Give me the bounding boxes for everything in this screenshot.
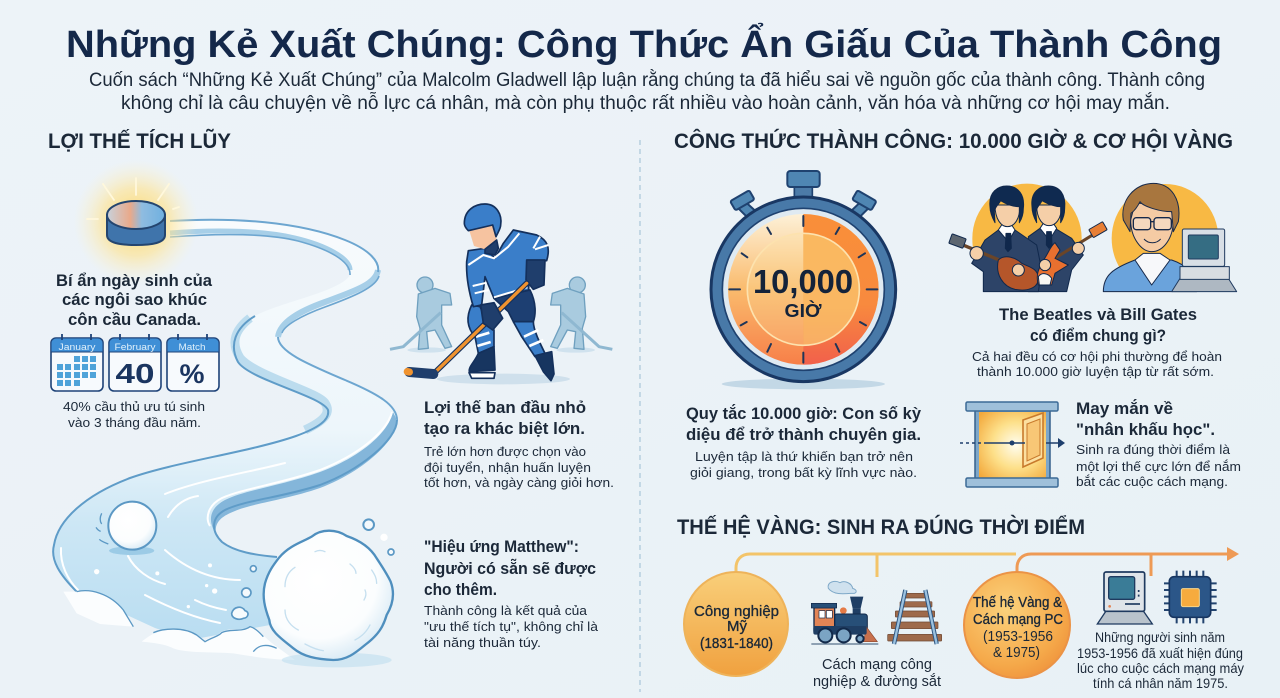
icon: window of opportunity [960, 402, 1065, 487]
illustration: hockey players [390, 204, 612, 384]
caption: railroad revolution [813, 656, 942, 690]
node: American industry: Công nghiệp [694, 604, 779, 620]
text block: 10,000 hour rule [686, 404, 922, 480]
node: golden generation and PC revolution: (1953-1956 [983, 629, 1053, 645]
small snowball [96, 502, 156, 555]
body: small advantage: đội tuyển, nhận huấn luyện [424, 460, 591, 475]
heading: small advantage [424, 398, 586, 438]
icon: microchip [1164, 571, 1217, 623]
heading: cumulative advantage: LỢI THẾ TÍCH LŨY [48, 129, 231, 153]
calendar: January [51, 334, 103, 391]
node: golden generation and PC revolution: Cách mạng PC [973, 612, 1063, 628]
heading: Beatles and Gates: có điểm chung gì? [1030, 326, 1166, 345]
icon: glowing puck [74, 160, 198, 284]
icon: stopwatch 10,000 hours: 10,000 [753, 263, 853, 300]
large snowball [264, 531, 393, 667]
heading: success formula: CÔNG THỨC THÀNH CÔNG: 10.000 GIỜ & CƠ HỘI VÀNG [674, 129, 1233, 153]
text block: Beatles and Gates [972, 305, 1222, 379]
snow piles [63, 591, 295, 660]
heading: small advantage: Lợi thế ban đầu nhỏ [424, 398, 586, 417]
timeline arrow [736, 547, 1239, 577]
caption: born 1953-1956: Những người sinh năm [1095, 629, 1225, 645]
figure: right background player [551, 277, 612, 353]
caption: railroad revolution: nghiệp & đường sắt [813, 673, 942, 690]
body: Beatles and Gates [972, 349, 1222, 379]
icon: stopwatch 10,000 hours: GIỜ [784, 300, 822, 321]
heading: demographic luck: "nhân khấu học". [1076, 420, 1215, 439]
caption: born 1953-1956: tính cá nhân năm 1975. [1093, 675, 1228, 691]
illustration: ice ribbon path [53, 220, 397, 640]
computer [1172, 229, 1237, 292]
node: golden generation and PC revolution: Thế hệ Vàng & [973, 595, 1062, 611]
snow particles [94, 519, 394, 619]
head and helmet [469, 225, 497, 249]
heading: Matthew effect [424, 537, 596, 599]
icons: three calendars [51, 334, 219, 391]
body: Matthew effect: Thành công là kết quả của [424, 603, 588, 618]
text: 40 percent caption: 40% cầu thủ ưu tú sinh [63, 399, 205, 414]
text block: demographic luck [1076, 399, 1241, 489]
text: birthday mystery heading [56, 272, 213, 329]
illustration: snowballs and snow [63, 502, 394, 667]
calendar: March percent [167, 334, 219, 391]
icon: steam locomotive [811, 581, 878, 644]
intro paragraph [89, 69, 1205, 114]
calendar: February 40 [109, 334, 161, 391]
figure: left background player [390, 277, 452, 353]
icon: railroad track [888, 590, 942, 644]
heading: demographic luck: May mắn về [1076, 399, 1173, 418]
node: American industry: Mỹ [727, 619, 748, 635]
body: demographic luck: bắt các cuộc cách mạng. [1076, 474, 1228, 489]
heading: Beatles and Gates: The Beatles và Bill Gates [999, 305, 1197, 324]
body: demographic luck: một lợi thế cực lớn để nắm [1076, 459, 1241, 474]
text: birthday mystery heading: côn cầu Canada. [68, 311, 201, 329]
heading: 10,000 hour rule: Quy tắc 10.000 giờ: Con số kỳ [686, 404, 922, 423]
text block: Matthew effect [424, 537, 599, 650]
text block: small advantage [424, 398, 614, 490]
heading: demographic luck [1076, 399, 1215, 439]
body: small advantage: tốt hơn, và ngày càng giỏi hơn. [424, 475, 614, 490]
text: 40 percent caption: vào 3 tháng đầu năm. [68, 415, 201, 430]
body: Beatles and Gates: Cả hai đều có cơ hội phi thường để hoàn [972, 349, 1222, 364]
figure: The Beatles [949, 184, 1107, 292]
node: golden generation and PC revolution [964, 572, 1070, 678]
caption: born 1953-1956: 1953-1956 đã xuất hiện đúng [1077, 645, 1243, 661]
intro paragraph: không chỉ là câu chuyện về nỗ lực cá nhân, mà còn phụ thuộc rất nhiều vào hoàn cảnh, văn hóa và những cơ hội may mắn. [121, 92, 1170, 114]
body: Matthew effect: "ưu thế tích tụ", không chỉ là [424, 619, 599, 634]
node: American industry: (1831-1840) [700, 636, 773, 652]
illustration: The Beatles and Bill Gates [949, 183, 1237, 292]
body: 10,000 hour rule [690, 449, 917, 480]
text: birthday mystery heading: Bí ẩn ngày sinh của [56, 272, 213, 290]
hockey stick [407, 283, 527, 374]
icon: stopwatch 10,000 hours [711, 171, 896, 389]
text: 40 percent caption [63, 399, 205, 430]
heading: 10,000 hour rule [686, 404, 922, 444]
legs [494, 290, 535, 322]
caption: railroad revolution: Cách mạng công [822, 656, 932, 673]
body: small advantage [424, 444, 614, 490]
node: golden generation and PC revolution: & 1975) [993, 645, 1040, 661]
caption: born 1953-1956 [1077, 629, 1244, 691]
calendar: February 40: February [114, 342, 156, 352]
torso and arms [467, 230, 548, 307]
heading: Matthew effect: "Hiệu ứng Matthew": [424, 537, 579, 556]
heading: Beatles and Gates [999, 305, 1197, 345]
figure: main player [407, 204, 570, 384]
heading: small advantage: tạo ra khác biệt lớn. [424, 419, 585, 438]
heading: Matthew effect: Người có sẵn sẽ được [424, 558, 596, 578]
body: 10,000 hour rule: Luyện tập là thứ khiến bạn trở nên [695, 449, 913, 464]
caption: born 1953-1956: lúc cho cuộc cách mạng máy [1077, 660, 1244, 676]
title: Những Kẻ Xuất Chúng: Công Thức Ẩn Giấu Của Thành Công [66, 21, 1222, 66]
node: American industry [684, 572, 788, 676]
intro paragraph: Cuốn sách “Những Kẻ Xuất Chúng” của Malcolm Gladwell lập luận rằng chúng ta đã hiểu sai về nguồn gốc của thành công. Thành công [89, 69, 1205, 91]
lower glove [481, 303, 503, 330]
body: small advantage: Trẻ lớn hơn được chọn vào [424, 444, 586, 459]
calendar: March percent: Match [178, 342, 206, 352]
body: demographic luck: Sinh ra đúng thời điểm là [1076, 442, 1231, 457]
calendar: February 40: 40 [116, 358, 154, 389]
heading: 10,000 hour rule: diệu để trở thành chuyên gia. [686, 425, 921, 444]
body: demographic luck [1076, 442, 1241, 489]
heading: golden generation: THẾ HỆ VÀNG: SINH RA ĐÚNG THỜI ĐIỂM [677, 515, 1085, 539]
body: Beatles and Gates: thành 10.000 giờ luyện tập từ rất sớm. [977, 364, 1214, 379]
guitars [955, 242, 1023, 270]
calendar: March percent: % [180, 359, 204, 389]
body: Matthew effect [424, 603, 599, 650]
calendar: January: January [58, 342, 96, 352]
figure: Bill Gates with computer [1103, 183, 1237, 292]
icon: personal computer [1097, 572, 1152, 624]
text: birthday mystery heading: các ngôi sao khúc [62, 291, 207, 309]
body: 10,000 hour rule: giỏi giang, trong bất kỳ lĩnh vực nào. [690, 465, 917, 480]
heading: Matthew effect: cho thêm. [424, 580, 497, 599]
body: Matthew effect: tài năng thuần túy. [424, 635, 541, 650]
